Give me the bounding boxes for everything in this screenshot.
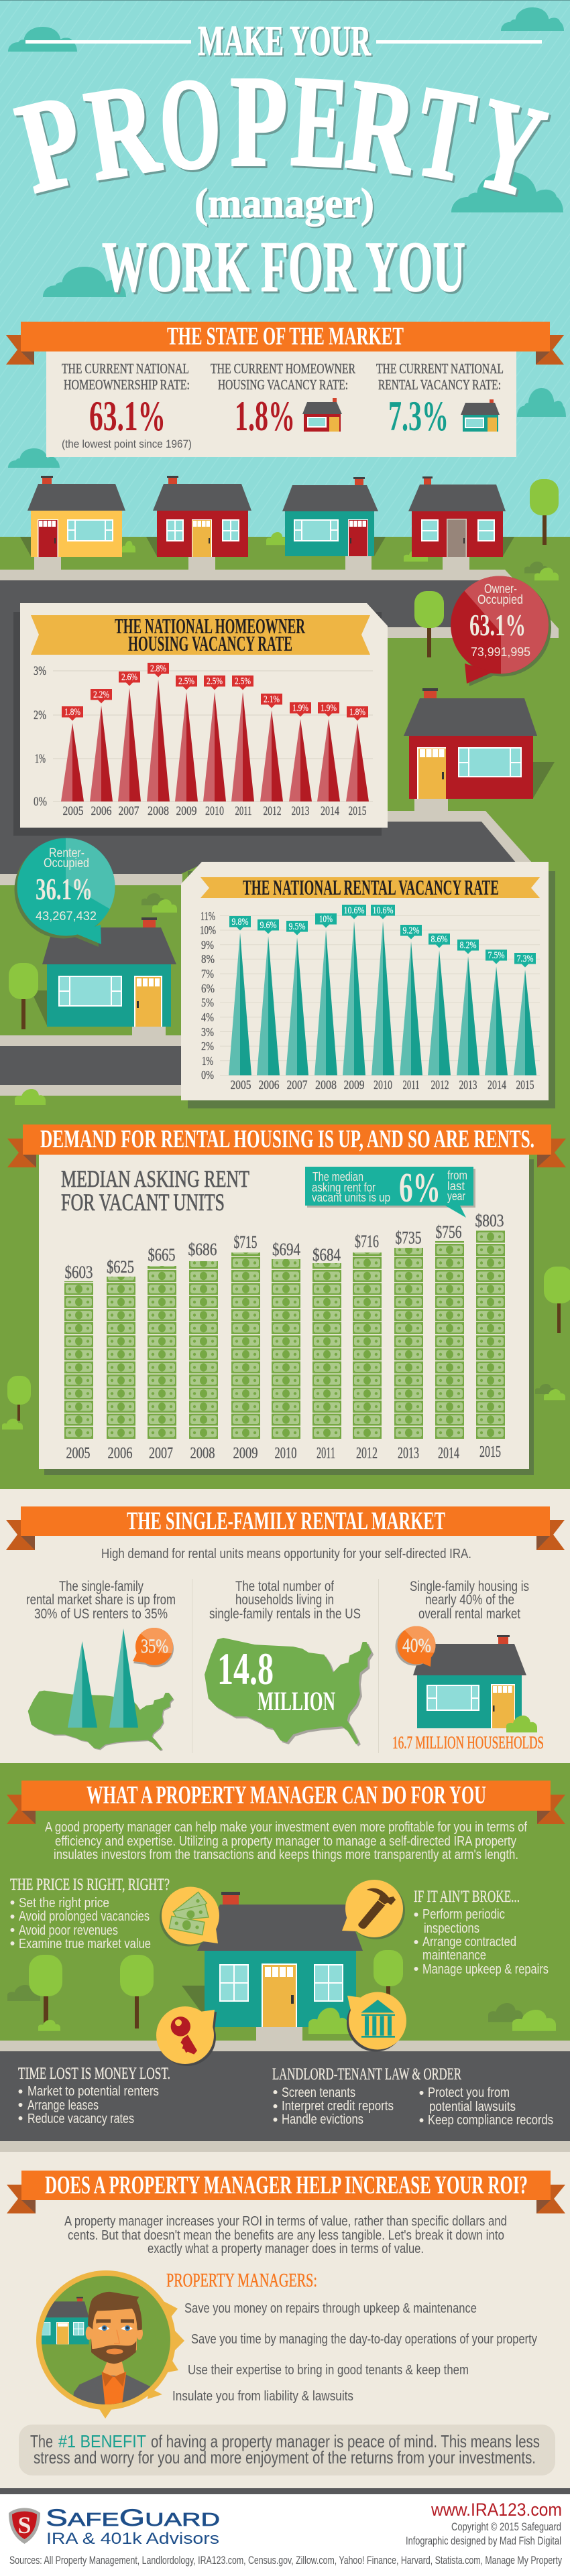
icon bubble: key <box>156 2006 217 2066</box>
stat: rental vacancy rate: 7.3% <box>388 393 449 440</box>
bar chart: homeowner vacancy rate 2005-2015 <box>34 663 373 818</box>
stat: 14.8 million: 14.8 <box>217 1643 274 1694</box>
tree <box>530 479 559 545</box>
list: the price is right: Set the right price <box>19 1896 109 1911</box>
road: manager section <box>0 2051 570 2141</box>
bar chart: rental vacancy rate 2005-2015: 10% <box>319 914 333 925</box>
sidewalk: upper diagonal <box>0 570 559 638</box>
bar chart: homeowner vacancy rate 2005-2015: 2008 <box>148 804 169 818</box>
pictogram chart: stacks of bills: 2009 <box>233 1445 258 1462</box>
list: time lost: TIME LOST IS MONEY LOST. <box>18 2065 170 2083</box>
column: market share up to 35%: 30% of US renters to 35% <box>34 1606 168 1622</box>
panel: median asking rent <box>39 1155 534 1475</box>
pictogram chart: stacks of bills: 2013 <box>398 1445 419 1462</box>
logo: SafeGuard: IRA & 401k Advisors <box>46 2530 219 2548</box>
bar chart: rental vacancy rate 2005-2015: 7.3% <box>516 954 534 964</box>
callout: rent up 6%: asking rent for <box>312 1181 376 1194</box>
background: grass <box>0 537 570 1489</box>
pictogram chart: stacks of bills: 2012 <box>356 1445 378 1462</box>
stat: homeownership rate: 63.1% <box>89 393 166 440</box>
bar chart: rental vacancy rate 2005-2015: 2006 <box>259 1078 279 1092</box>
pictogram chart: stacks of bills: 2011 <box>317 1445 335 1462</box>
title word: property: P <box>5 66 97 220</box>
bar chart: rental vacancy rate 2005-2015: 10.6% <box>343 905 365 916</box>
icon: small red house <box>302 398 342 432</box>
stat: homeownership rate <box>62 361 192 450</box>
tree: right edge <box>544 1267 570 1333</box>
bar chart: rental vacancy rate 2005-2015: 0% <box>201 1068 214 1082</box>
background: property manager section <box>0 1763 570 2041</box>
bar chart: rental vacancy rate 2005-2015: 2013 <box>459 1078 477 1092</box>
bar chart: homeowner vacancy rate 2005-2015: 1.9% <box>292 703 308 714</box>
title line: make your <box>25 17 542 64</box>
callout: rent up 6%: The median <box>312 1170 363 1183</box>
bar chart: homeowner vacancy rate 2005-2015: 2.2% <box>93 690 109 700</box>
house: large red <box>404 688 555 811</box>
bar chart: homeowner vacancy rate 2005-2015: 1.9% <box>321 703 337 714</box>
map: United States with spikes <box>28 1628 174 1751</box>
stat: homeowner vacancy rate <box>211 361 355 440</box>
bar chart: homeowner vacancy rate 2005-2015: 2009 <box>176 804 197 818</box>
list: if it ain't broke: maintenance <box>422 1948 486 1963</box>
ribbon: single-family <box>6 1506 565 1550</box>
callout: owner-occupied: 63.1% <box>469 608 526 642</box>
bar chart: rental vacancy rate 2005-2015: 7% <box>201 967 214 980</box>
panel: national homeowner housing vacancy rate <box>13 603 388 836</box>
list: property managers <box>166 2270 537 2404</box>
column: market share up to 35%: rental market share is up from <box>26 1592 176 1608</box>
title line: make your: MAKE YOUR <box>198 17 372 64</box>
list: the price is right: THE PRICE IS RIGHT, RIGHT? <box>10 1876 170 1894</box>
sidewalk: left upper <box>0 874 182 885</box>
list: property managers: Save you money on repairs through upkeep & maintenance <box>184 2301 477 2316</box>
trees and bushes: manager section <box>7 1950 556 2031</box>
column: 14.8 million households: The total number of <box>235 1579 334 1594</box>
bushes near teal house <box>15 893 177 1105</box>
list: time lost <box>18 2065 170 2126</box>
pictogram chart: stacks of bills: $715 <box>233 1232 258 1252</box>
list: the price is right <box>10 1876 170 1951</box>
pictogram chart: stacks of bills: $735 <box>396 1228 421 1248</box>
house: yellow <box>20 476 125 570</box>
callout: number one benefit: The <box>30 2431 53 2451</box>
column: 40% of rental market <box>392 1579 544 1752</box>
list: if it ain't broke: IF IT AIN'T BROKE... <box>414 1888 520 1906</box>
callout: rent up 6%: from <box>447 1169 467 1182</box>
footer <box>9 2500 562 2567</box>
bar chart: homeowner vacancy rate 2005-2015: 1.8% <box>64 707 80 718</box>
background: single-family section <box>0 1489 570 1763</box>
column: 14.8 million households: single-family rentals in the US <box>209 1606 361 1622</box>
stat: 14.8 million <box>217 1643 335 1716</box>
tree beside teal house <box>9 963 38 1029</box>
bar chart: rental vacancy rate 2005-2015: 7.5% <box>488 950 504 961</box>
title word: property: R <box>77 54 168 208</box>
stat: homeowner vacancy rate: 1.8% <box>235 393 295 440</box>
callout: renter-occupied: Renter- <box>49 846 84 860</box>
bar chart: homeowner vacancy rate 2005-2015: 2.1% <box>264 694 280 705</box>
callout: renter-occupied: 36.1% <box>36 872 93 906</box>
pictogram chart: stacks of bills: 2010 <box>275 1445 296 1462</box>
bar chart: rental vacancy rate 2005-2015: 9.5% <box>288 921 306 932</box>
banner: homeowner vacancy <box>31 614 370 655</box>
column: 40% of rental market: Single-family housing is <box>410 1579 529 1594</box>
title word: property: P <box>230 49 288 193</box>
callout: number one benefit <box>19 2425 555 2475</box>
portrait: property manager <box>36 2270 184 2419</box>
stat: homeownership rate: (the lowest point since 1967) <box>62 438 192 450</box>
bar chart: rental vacancy rate 2005-2015: 2010 <box>374 1078 392 1092</box>
pictogram chart: stacks of bills: $603 <box>64 1263 93 1282</box>
callout: owner-occupied: Owner- <box>484 582 517 596</box>
bar chart: homeowner vacancy rate 2005-2015: 2.5% <box>207 676 223 687</box>
list: if it ain't broke <box>414 1888 549 1977</box>
subtitle: High demand for rental units means opportunity for your self-directed IRA. <box>101 1547 471 1561</box>
title word: property: O <box>156 50 224 198</box>
list: the price is right: Avoid prolonged vacancies <box>19 1909 150 1924</box>
stat: homeownership rate: THE CURRENT NATIONAL <box>62 361 189 377</box>
bar chart: homeowner vacancy rate 2005-2015: 2.6% <box>121 672 137 683</box>
ROI paragraph <box>64 2214 507 2256</box>
bar chart: rental vacancy rate 2005-2015: 2012 <box>431 1078 449 1092</box>
bar chart: rental vacancy rate 2005-2015: 5% <box>201 996 214 1009</box>
chart title: median asking rent: FOR VACANT UNITS <box>61 1189 225 1216</box>
bar chart: rental vacancy rate 2005-2015 <box>200 905 540 1092</box>
stat: rental vacancy rate <box>376 361 504 440</box>
banner: homeowner vacancy: HOUSING VACANCY RATE <box>128 631 292 655</box>
section: ROI <box>7 2171 565 2475</box>
bar chart: rental vacancy rate 2005-2015: 8.2% <box>460 940 476 951</box>
callout: renter-occupied: 43,267,432 <box>36 909 97 923</box>
list: time lost: Reduce vacancy rates <box>27 2112 134 2126</box>
pictogram chart: stacks of bills: 2006 <box>107 1445 133 1462</box>
callout: rent up 6% <box>305 1165 475 1218</box>
house: red with grey door <box>408 476 514 570</box>
bar chart: rental vacancy rate 2005-2015: 3% <box>201 1025 214 1039</box>
logo: SafeGuard: S AFE G UARD <box>46 2505 220 2531</box>
sidewalk: manager section <box>0 2041 570 2051</box>
pictogram chart: stacks of bills: $756 <box>436 1222 461 1242</box>
list: property managers: PROPERTY MANAGERS: <box>166 2270 317 2291</box>
bar chart: homeowner vacancy rate 2005-2015: 2.5% <box>178 676 194 687</box>
bar chart: rental vacancy rate 2005-2015: 9% <box>201 938 214 952</box>
stats panel <box>46 351 516 457</box>
bar chart: rental vacancy rate 2005-2015: 10% <box>200 923 216 937</box>
bar chart: homeowner vacancy rate 2005-2015: 2011 <box>235 804 252 818</box>
bar chart: homeowner vacancy rate 2005-2015: 2.5% <box>235 676 251 687</box>
pictogram chart: stacks of bills: $686 <box>188 1240 217 1259</box>
bushes: right edge <box>535 1384 565 1400</box>
list: landlord-tenant law and order: LANDLORD-TENANT LAW & ORDER <box>272 2065 461 2083</box>
list: the price is right: Avoid poor revenues <box>19 1923 118 1938</box>
bar chart: rental vacancy rate 2005-2015: 2007 <box>287 1078 307 1092</box>
stat: rental vacancy rate: THE CURRENT NATIONAL <box>376 361 504 377</box>
callout: owner-occupied: 73,991,995 <box>471 645 530 659</box>
bar chart: homeowner vacancy rate 2005-2015: 3% <box>34 664 46 678</box>
ribbon: property manager <box>7 1781 565 1824</box>
stat: homeownership rate: HOMEOWNERSHIP RATE: <box>64 377 190 393</box>
section: single-family rental market <box>6 1506 565 1753</box>
title <box>5 17 557 307</box>
website and credits: www.IRA123.com <box>431 2500 562 2520</box>
callout: rent up 6%: year <box>447 1189 465 1203</box>
callout: 40%: 40% <box>402 1634 431 1657</box>
pictogram chart: stacks of bills: 2007 <box>149 1445 173 1462</box>
list: time lost: Arrange leases <box>27 2098 99 2113</box>
bar chart: homeowner vacancy rate 2005-2015: 1.8% <box>349 707 365 718</box>
bar chart: rental vacancy rate 2005-2015: 2015 <box>516 1078 534 1092</box>
bar chart: rental vacancy rate 2005-2015: 2009 <box>343 1078 365 1092</box>
tree: left edge with bush <box>2 1376 31 1429</box>
pictogram chart: stacks of bills: 2014 <box>438 1445 459 1462</box>
column dividers <box>192 1579 379 1753</box>
bar chart: homeowner vacancy rate 2005-2015: 2015 <box>349 804 366 818</box>
banner: homeowner vacancy: THE NATIONAL HOMEOWNER <box>115 614 306 638</box>
clouds <box>8 7 566 468</box>
callout: renter-occupied <box>15 838 115 947</box>
bar chart: homeowner vacancy rate 2005-2015: 1% <box>35 752 46 766</box>
title word: property <box>5 49 557 224</box>
title word: property: Y <box>462 70 557 224</box>
tree beside owner callout <box>414 591 444 657</box>
bar chart: rental vacancy rate 2005-2015: 2005 <box>231 1078 251 1092</box>
ribbon: state of the market <box>6 322 564 365</box>
section: state of the market <box>6 322 564 457</box>
sidewalk and road: left lower <box>0 1035 182 1096</box>
list: if it ain't broke: inspections <box>424 1921 479 1936</box>
pictogram chart: stacks of bills: $694 <box>272 1240 300 1259</box>
bar chart: homeowner vacancy rate 2005-2015: 2013 <box>291 804 310 818</box>
stat: homeowner vacancy rate: HOUSING VACANCY RATE: <box>218 377 348 393</box>
callout: 35%: 35% <box>141 1635 168 1657</box>
column: 40% of rental market: nearly 40% of the <box>425 1592 514 1608</box>
column: 14.8 million households: households living in <box>235 1592 334 1608</box>
list: time lost: Market to potential renters <box>27 2084 159 2099</box>
title word: property: T <box>406 58 484 209</box>
list: property managers: Insulate you from liability & lawsuits <box>172 2389 353 2404</box>
pictogram chart: stacks of bills: 2008 <box>190 1445 215 1462</box>
callout: rent up 6%: last <box>447 1179 465 1193</box>
house: teal <box>282 477 386 570</box>
list: landlord-tenant law and order: Interpret credit reports <box>282 2099 394 2114</box>
pictogram chart: stacks of bills: $684 <box>312 1245 341 1265</box>
callout: 40% <box>396 1626 436 1667</box>
house: red <box>146 476 251 570</box>
pictogram chart: stacks of bills: $665 <box>148 1245 176 1265</box>
list: landlord-tenant law and order: Handle evictions <box>282 2112 363 2127</box>
ROI paragraph: exactly what a property manager does in terms of value. <box>148 2242 424 2256</box>
callout: 35% <box>133 1628 174 1667</box>
bar chart: homeowner vacancy rate 2005-2015: 2.8% <box>150 663 166 674</box>
bar chart: homeowner vacancy rate 2005-2015: 2% <box>34 708 46 722</box>
column: 14.8 million households <box>205 1579 374 1746</box>
callout: rent up 6%: 6% <box>399 1165 441 1211</box>
pictogram chart: stacks of bills: $803 <box>475 1211 504 1230</box>
list: landlord-tenant law and order: Screen tenants <box>282 2085 355 2100</box>
bar chart: rental vacancy rate 2005-2015: 6% <box>201 982 215 995</box>
list: if it ain't broke: Perform periodic <box>422 1907 505 1922</box>
bar chart: rental vacancy rate 2005-2015: 2% <box>201 1039 214 1053</box>
map: United States <box>205 1638 374 1746</box>
bar chart: rental vacancy rate 2005-2015: 2011 <box>402 1078 420 1092</box>
column: market share up to 35%: The single-family <box>59 1579 144 1594</box>
bar chart: rental vacancy rate 2005-2015: 1% <box>202 1054 213 1068</box>
bar chart: homeowner vacancy rate 2005-2015: 2012 <box>263 804 282 818</box>
list: landlord-tenant law and order: potential lawsuits <box>429 2100 516 2114</box>
bar chart: homeowner vacancy rate 2005-2015: 2006 <box>91 804 111 818</box>
title word: property: E <box>288 50 351 196</box>
column: 40% of rental market: overall rental market <box>418 1606 520 1622</box>
background: footer <box>0 2494 570 2576</box>
callout: renter-occupied: Occupied <box>44 856 89 871</box>
callout: rent up 6%: vacant units is up <box>312 1191 390 1204</box>
bar chart: rental vacancy rate 2005-2015: 9.2% <box>402 925 420 936</box>
chart title: median asking rent: MEDIAN ASKING RENT <box>61 1165 249 1192</box>
list: the price is right: Examine true market value <box>19 1937 151 1951</box>
list: property managers: Use their expertise to bring in good tenants & keep them <box>188 2363 469 2378</box>
bar chart: homeowner vacancy rate 2005-2015: 2010 <box>205 804 224 818</box>
road <box>0 580 549 874</box>
bar chart: homeowner vacancy rate 2005-2015: 2005 <box>63 804 83 818</box>
title word: manager: (manager) <box>194 181 374 227</box>
logo: SafeGuard <box>9 2505 220 2548</box>
sidewalk: lower diagonal <box>388 811 532 863</box>
background: sky <box>0 0 570 537</box>
bar chart: rental vacancy rate 2005-2015: 10.6% <box>373 905 393 916</box>
list: if it ain't broke: Arrange contracted <box>422 1935 516 1949</box>
callout: owner-occupied <box>451 576 551 686</box>
chart title: median asking rent <box>61 1165 249 1216</box>
bar chart: rental vacancy rate 2005-2015: 9.6% <box>260 920 276 931</box>
bar chart: rental vacancy rate 2005-2015: 2008 <box>315 1078 337 1092</box>
intro paragraph <box>45 1820 527 1862</box>
icon bubble: hammer <box>342 1880 405 1939</box>
title word: property: R <box>340 52 424 203</box>
bar chart: rental vacancy rate 2005-2015: 9.8% <box>232 917 248 927</box>
icon bubble: courthouse <box>347 1992 406 2052</box>
bar chart: homeowner vacancy rate 2005-2015: 2007 <box>118 804 139 818</box>
bar chart: rental vacancy rate 2005-2015: 8.6% <box>431 934 448 945</box>
pictogram chart: stacks of bills: 2005 <box>66 1445 90 1462</box>
stat: rental vacancy rate: RENTAL VACANCY RATE: <box>378 377 501 393</box>
bushes behind houses <box>122 532 559 580</box>
pictogram chart: stacks of bills <box>64 1211 505 1462</box>
logo: SafeGuard: S <box>17 2512 32 2538</box>
icon: small teal house <box>461 399 500 432</box>
bar chart: rental vacancy rate 2005-2015: 2014 <box>488 1078 506 1092</box>
list: landlord-tenant law and order: Protect you from <box>428 2085 510 2100</box>
house: teal with door <box>413 1635 526 1728</box>
column: market share up to 35% <box>26 1579 176 1751</box>
callout: owner-occupied: Occupied <box>477 593 523 607</box>
list: landlord-tenant law and order <box>272 2065 553 2128</box>
bush by house <box>506 1716 537 1732</box>
sidewalk: below road <box>0 2141 570 2152</box>
pictogram chart: stacks of bills: $625 <box>107 1257 134 1277</box>
section: what a property manager can do <box>0 1781 570 2152</box>
ribbon: demand <box>7 1124 566 1167</box>
pictogram chart: stacks of bills: 2015 <box>479 1443 501 1461</box>
stat: 14.8 million: MILLION <box>258 1686 335 1716</box>
stat: homeowner vacancy rate: THE CURRENT HOMEOWNER <box>211 361 355 377</box>
footer bar <box>0 2488 570 2494</box>
bar chart: rental vacancy rate 2005-2015: 11% <box>201 909 215 923</box>
panel: national rental vacancy rate <box>181 862 555 1108</box>
background: ROI section <box>0 2152 570 2488</box>
website and credits <box>406 2500 562 2547</box>
bar chart: rental vacancy rate 2005-2015: 4% <box>201 1011 214 1024</box>
icon bubble: money <box>160 1887 219 1946</box>
house: large teal <box>31 917 176 1036</box>
callout: number one benefit: #1 BENEFIT <box>58 2431 146 2451</box>
ribbon: state of the market: THE STATE OF THE MARKET <box>167 322 404 350</box>
bar chart: homeowner vacancy rate 2005-2015: 0% <box>34 795 47 809</box>
section: demand for rental housing <box>2 1124 570 1475</box>
bar chart: homeowner vacancy rate 2005-2015: 2014 <box>321 804 339 818</box>
ribbon: ROI <box>7 2171 565 2213</box>
pictogram chart: stacks of bills: $716 <box>355 1232 379 1251</box>
house: central teal <box>182 1892 363 2041</box>
ROI paragraph: cents. But that doesn't mean the benefits are any less tangible. Let's break it down into <box>68 2228 504 2243</box>
bar chart: rental vacancy rate 2005-2015: 8% <box>201 952 215 966</box>
